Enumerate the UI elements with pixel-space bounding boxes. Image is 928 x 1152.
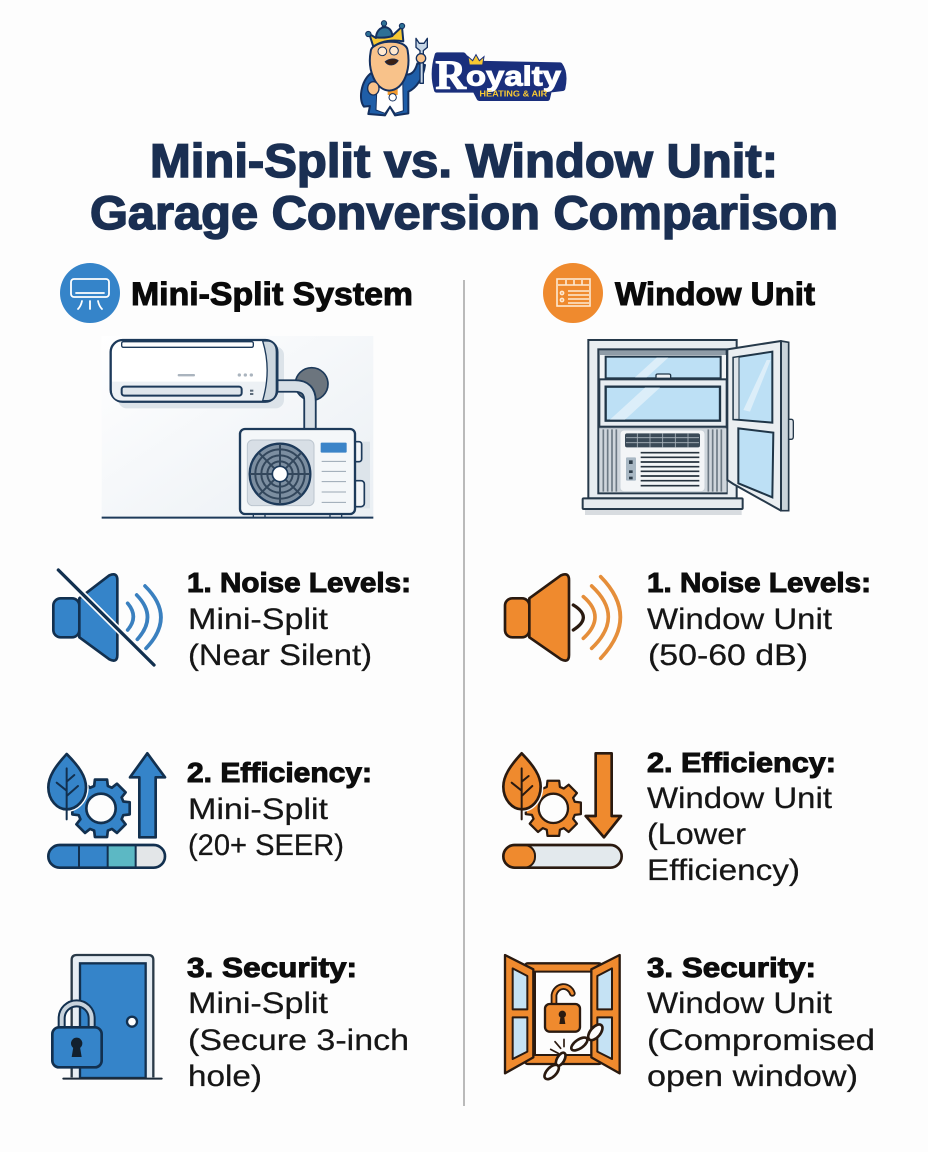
text: noise levels mini-split: Mini-Split bbox=[188, 603, 329, 636]
text: noise levels window unit: 1. Noise Levels: bbox=[647, 567, 871, 598]
text: security mini-split: Mini-Split bbox=[188, 987, 329, 1020]
text: noise levels window unit: Window Unit bbox=[647, 603, 833, 636]
icon: high efficiency bbox=[48, 753, 165, 868]
text: noise levels mini-split: (Near Silent) bbox=[188, 639, 372, 672]
text: efficiency mini-split: (20+ SEER) bbox=[188, 829, 344, 862]
text: security mini-split bbox=[187, 952, 409, 1093]
text: security window unit: (Compromised bbox=[647, 1024, 875, 1057]
title bbox=[90, 134, 838, 239]
text: efficiency window unit: (Lower bbox=[647, 818, 746, 851]
icon: open window with broken chain bbox=[505, 955, 620, 1082]
title: Garage Conversion Comparison bbox=[90, 186, 838, 239]
text: efficiency mini-split bbox=[187, 757, 372, 862]
text: efficiency window unit: Efficiency) bbox=[647, 854, 800, 887]
icon: window unit badge bbox=[543, 263, 603, 323]
icon: muted speaker bbox=[53, 570, 161, 665]
illustration: window air conditioner with open window bbox=[583, 340, 793, 515]
icon: mini-split badge bbox=[60, 263, 120, 323]
wordmark: oyalty bbox=[466, 60, 562, 91]
heading: Window Unit: Window Unit bbox=[615, 276, 815, 312]
text: efficiency window unit: 2. Efficiency: bbox=[647, 747, 836, 778]
text: noise levels window unit bbox=[647, 567, 871, 672]
text: efficiency window unit bbox=[647, 747, 836, 887]
text: security window unit bbox=[647, 952, 875, 1093]
text: security mini-split: (Secure 3-inch bbox=[188, 1024, 409, 1057]
text: noise levels mini-split: 1. Noise Levels: bbox=[187, 567, 411, 598]
illustration: mini-split indoor and outdoor units bbox=[102, 336, 373, 518]
icon: loud speaker bbox=[505, 574, 620, 661]
text: noise levels mini-split bbox=[187, 567, 411, 672]
panel: window unit column bbox=[500, 263, 875, 1093]
mascot king bbox=[361, 21, 427, 115]
text: efficiency mini-split: Mini-Split bbox=[188, 793, 329, 826]
heading: Mini-Split System: Mini-Split System bbox=[131, 276, 413, 312]
wordmark: R bbox=[435, 53, 467, 99]
text: security mini-split: 3. Security: bbox=[187, 952, 357, 983]
text: security mini-split: hole) bbox=[188, 1060, 262, 1093]
text: noise levels window unit: (50-60 dB) bbox=[648, 639, 808, 672]
center divider bbox=[463, 280, 465, 1106]
text: efficiency mini-split: 2. Efficiency: bbox=[187, 757, 372, 788]
wordmark: HEATING & AIR bbox=[479, 90, 548, 99]
text: efficiency window unit: Window Unit bbox=[647, 782, 833, 815]
logo: Royalty Heating & Air bbox=[361, 21, 564, 115]
text: security window unit: Window Unit bbox=[647, 987, 833, 1020]
icon: locked door bbox=[52, 955, 162, 1079]
text: security window unit: open window) bbox=[647, 1060, 858, 1093]
panel: mini-split column bbox=[48, 263, 413, 1093]
text: security window unit: 3. Security: bbox=[647, 952, 816, 983]
icon: low efficiency bbox=[500, 753, 622, 868]
title: Mini-Split vs. Window Unit: bbox=[150, 134, 778, 187]
wordmark bbox=[434, 53, 564, 99]
